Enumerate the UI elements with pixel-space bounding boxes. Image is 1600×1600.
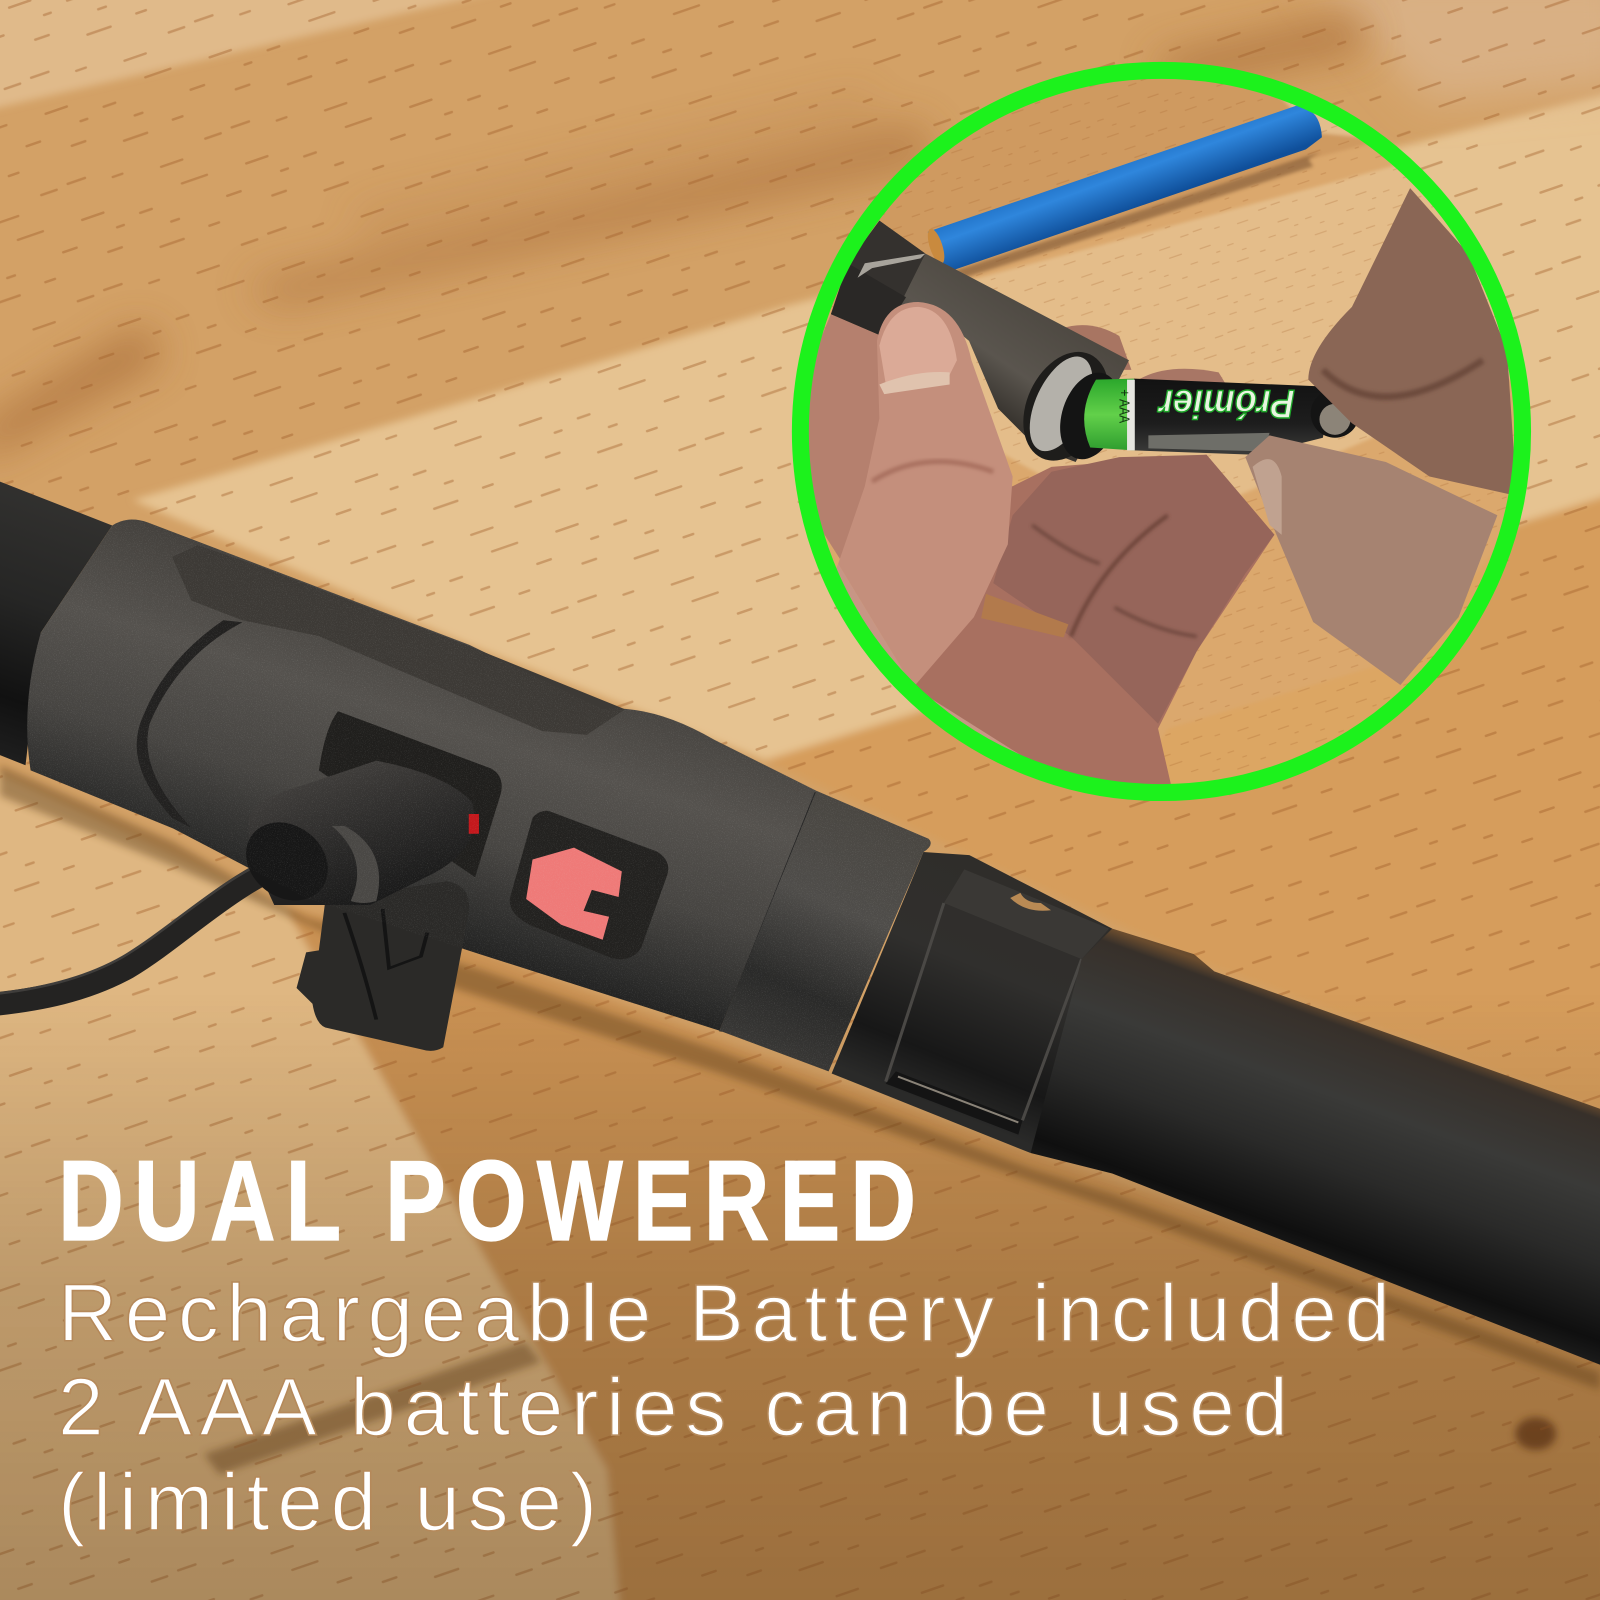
battery size label: + AAA xyxy=(1115,389,1131,423)
lower middle fingers xyxy=(993,455,1274,724)
flashlight shadow xyxy=(0,765,1600,1390)
inset: inserting AAA battery xyxy=(780,50,1540,826)
blue rechargeable battery xyxy=(924,106,1322,278)
flashlight grip body xyxy=(27,520,816,1031)
AAA battery xyxy=(1084,379,1359,455)
green ring xyxy=(800,70,1523,793)
gold ring xyxy=(981,594,1068,637)
flashlight barrel xyxy=(1031,929,1600,1378)
line: AAA batteries: 2 AAA batteries can be used xyxy=(58,1362,1288,1453)
power button xyxy=(510,811,668,959)
left hand back fingers xyxy=(799,314,1226,564)
inset photo xyxy=(808,79,1514,784)
palm base xyxy=(916,454,1274,784)
right thumb xyxy=(1245,435,1497,685)
USB rubber cap xyxy=(297,881,469,1051)
USB cable xyxy=(0,849,306,1005)
red charging LED xyxy=(469,814,479,834)
battery label: Prómier xyxy=(1157,382,1295,426)
body text xyxy=(58,1268,1390,1548)
USB recess xyxy=(319,711,502,877)
flashlight collar xyxy=(719,791,931,1071)
grip details, USB port and switch xyxy=(137,545,816,1051)
grip section seam xyxy=(137,620,242,828)
smooth upper grip inset xyxy=(172,545,625,735)
left hand front xyxy=(836,302,1274,784)
red bear logo xyxy=(526,848,622,940)
inset wood xyxy=(822,79,1514,784)
thumb and palm xyxy=(838,302,1013,687)
flashlight xyxy=(0,480,1600,1378)
neck slot band xyxy=(886,869,1109,1135)
flashlight head xyxy=(0,480,112,765)
textured speckle on grip xyxy=(20,510,939,1082)
collar seam xyxy=(721,792,816,1031)
line: limited use: (limited use) xyxy=(58,1457,597,1548)
flashlight neck xyxy=(832,852,1112,1153)
right hand upper fingers xyxy=(1308,188,1517,496)
heading: DUAL POWERED: DUAL POWERED xyxy=(58,1137,926,1264)
flashlight end with threads xyxy=(831,221,1131,474)
USB connector xyxy=(235,761,474,905)
line: rechargeable battery: Rechargeable Battery included xyxy=(58,1268,1390,1359)
steel threads xyxy=(1023,352,1106,461)
